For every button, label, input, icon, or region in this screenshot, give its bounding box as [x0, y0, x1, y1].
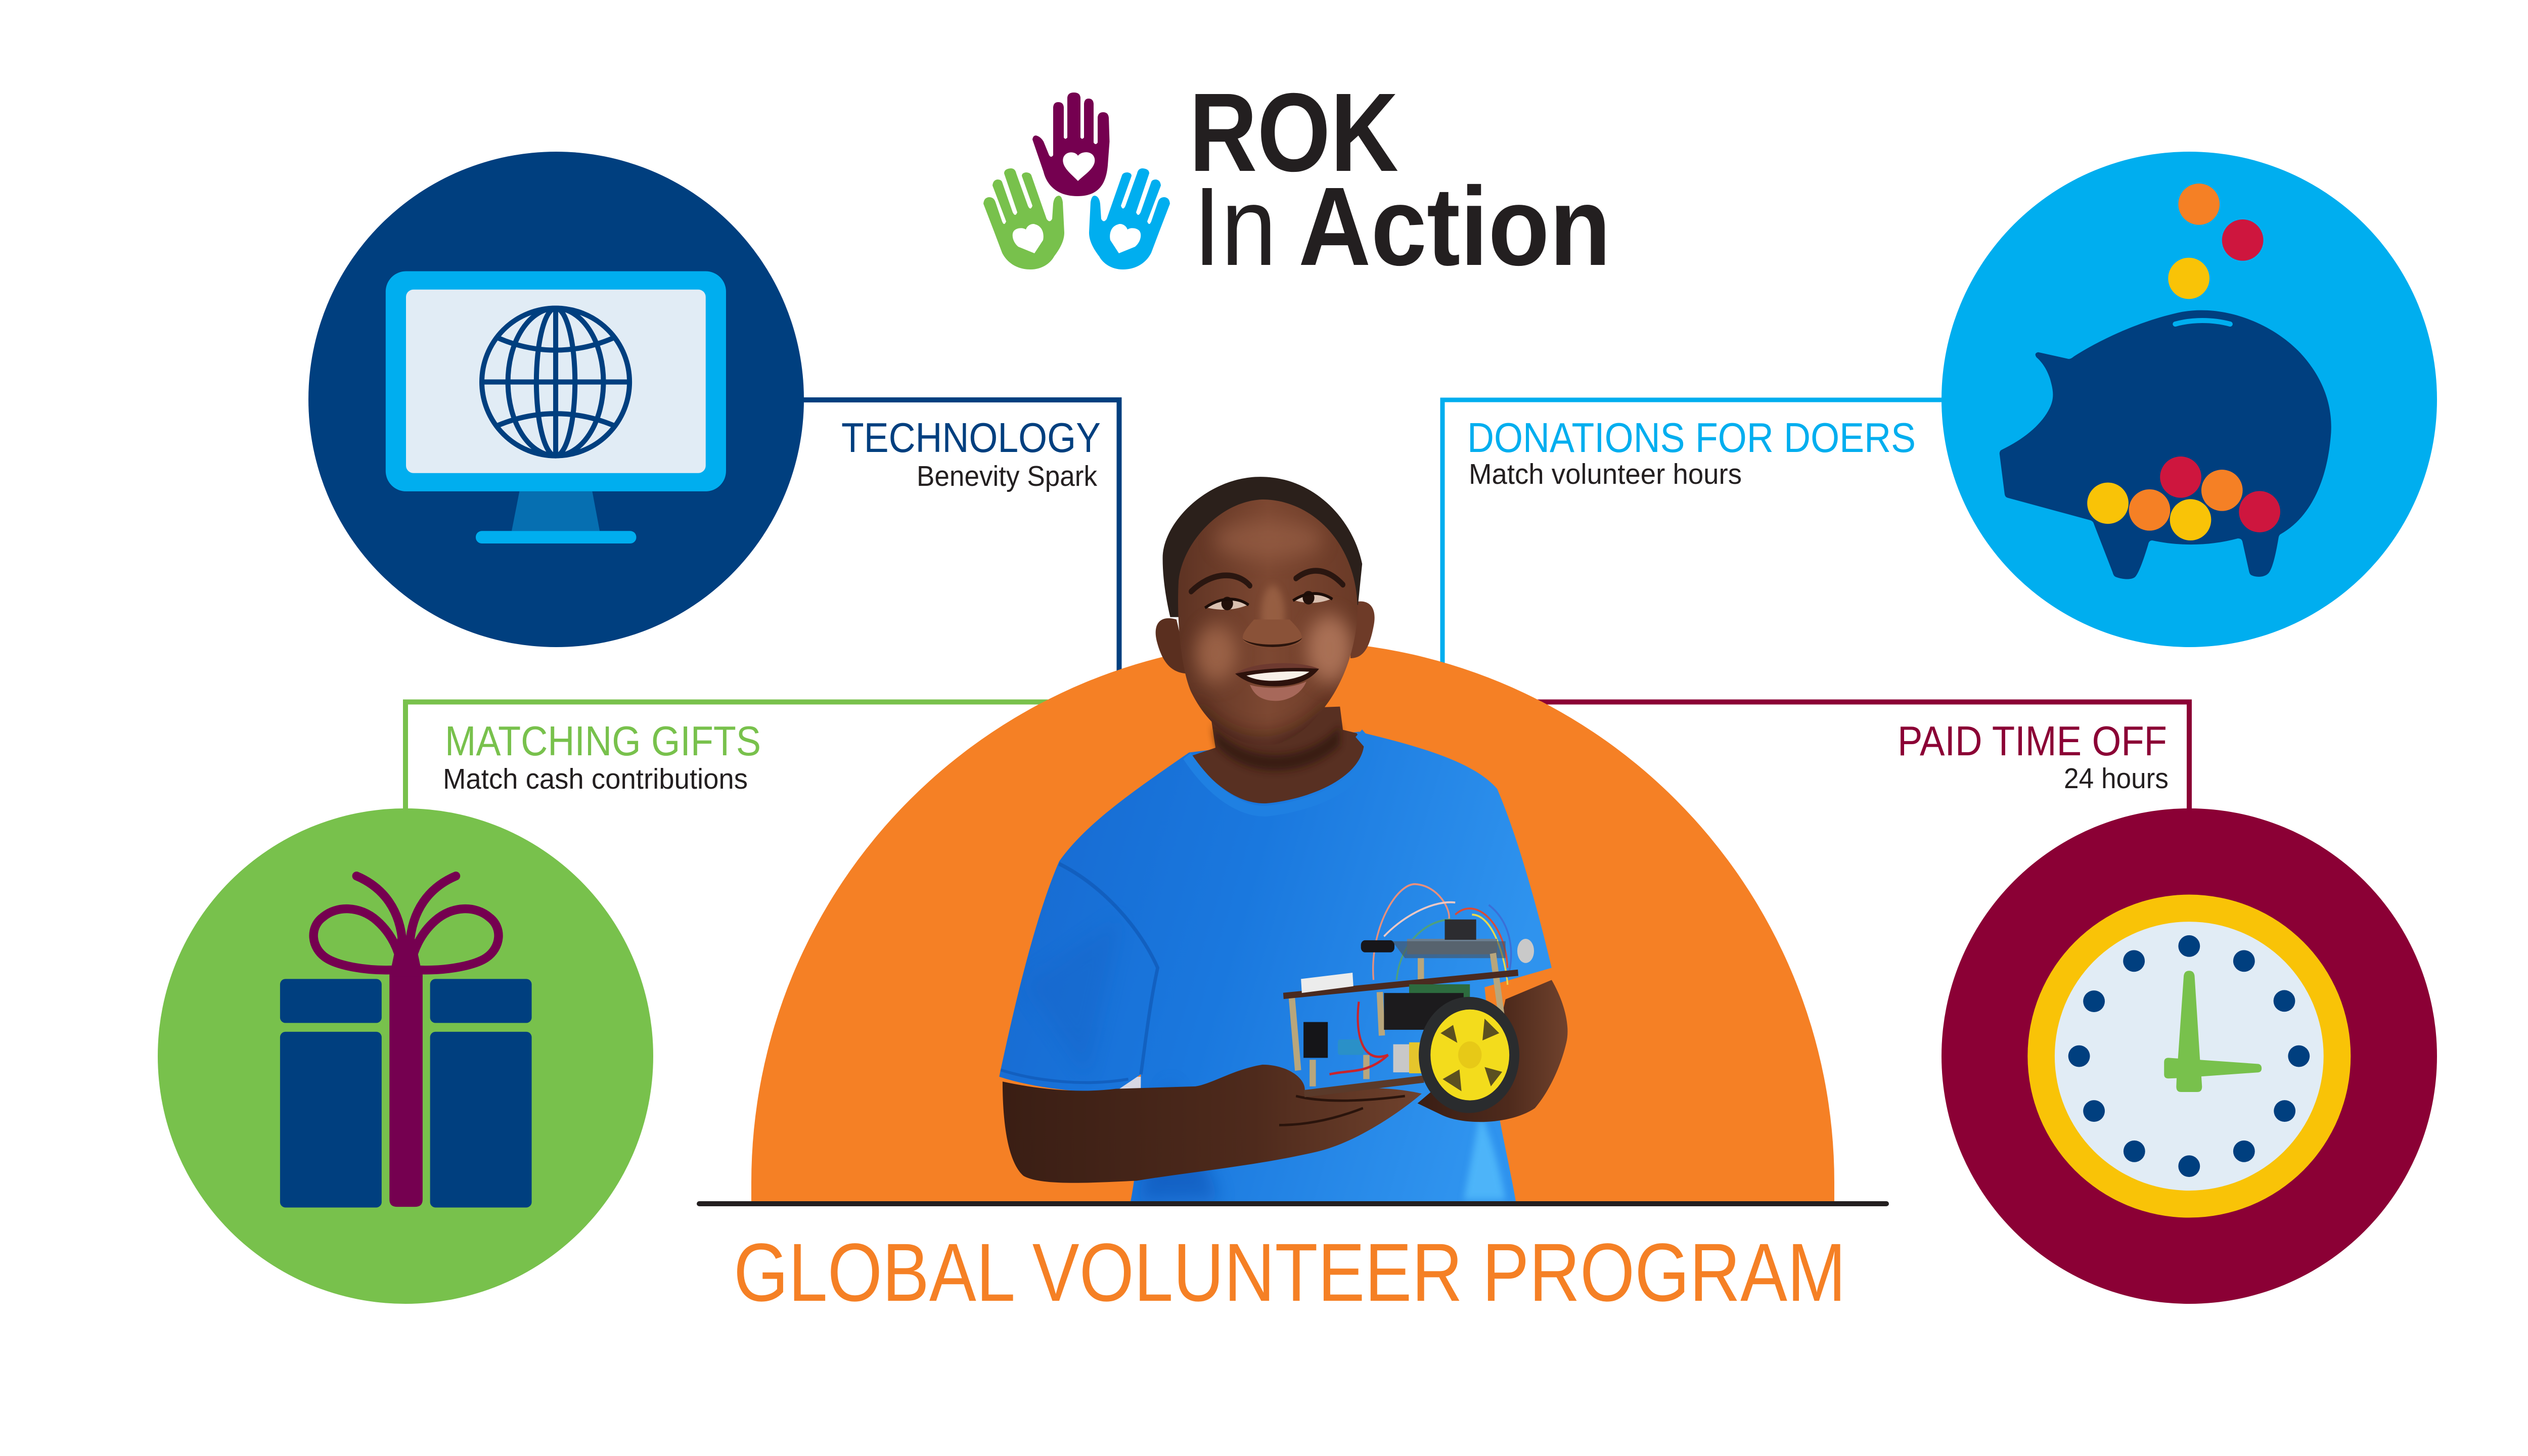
robot posts: [1292, 953, 1502, 1086]
logo wordmark: Action: Action: [1298, 164, 1611, 289]
subtext: match volunteer hours: Match volunteer hours: [1469, 458, 1742, 490]
connector: technology: [803, 400, 1119, 677]
connector: matching gifts: [405, 702, 1067, 811]
photo: smiling boy holding a robot: [999, 477, 1567, 1203]
label: matching gifts: [443, 717, 761, 795]
t-shirt: [999, 732, 1552, 1203]
icon: matching gifts circle with gift box: [158, 808, 653, 1304]
subtext: benevity spark: Benevity Spark: [917, 460, 1097, 492]
right arm and hand: [1418, 980, 1567, 1122]
coin slot: [2175, 321, 2230, 324]
heading: matching gifts: MATCHING GIFTS: [445, 717, 761, 764]
left ear: [1156, 618, 1189, 674]
left arm and hand: [1003, 1065, 1422, 1183]
label: technology: [841, 414, 1101, 492]
heading: paid time off: PAID TIME OFF: [1898, 717, 2167, 764]
coins: [2087, 184, 2280, 540]
label: donations for doers: [1467, 414, 1916, 490]
connector: paid time off: [1532, 702, 2189, 811]
eyes: [1206, 595, 1332, 610]
robot white block: [1301, 973, 1353, 993]
nose: [1242, 619, 1302, 648]
connector: donations for doers: [1442, 400, 1942, 672]
subtext: 24 hours: 24 hours: [2064, 762, 2169, 795]
title: global volunteer program: GLOBAL VOLUNTEER PROGRAM: [734, 1226, 1846, 1318]
robot lower plate: [1304, 1079, 1424, 1094]
robot components: [1303, 1022, 1328, 1058]
logo wordmark: ROK: ROK: [1189, 70, 1398, 195]
baseline bar: [697, 1201, 1889, 1206]
orange semicircle: [751, 641, 1834, 1203]
robot: [1283, 884, 1534, 1113]
logo icon: purple hand: [1032, 93, 1109, 196]
infographic canvas: [158, 93, 2437, 1304]
eyebrows: [1191, 571, 1343, 592]
chin shadow on neck: [1212, 726, 1340, 770]
face: [1178, 499, 1358, 755]
logo: ROK In Action: [983, 70, 1611, 289]
robot motor: [1393, 1044, 1410, 1072]
right ear: [1350, 601, 1375, 658]
icon: technology circle with monitor and globe: [308, 152, 804, 647]
robot wires: [1373, 884, 1511, 985]
monitor stand: [512, 491, 600, 531]
monitor base: [476, 531, 636, 543]
heading: donations for doers: DONATIONS FOR DOERS: [1467, 414, 1916, 461]
icon: donations circle with piggy bank and coins: [1942, 152, 2437, 647]
label: paid time off: [1898, 717, 2169, 795]
subtext: match cash contributions: Match cash contributions: [443, 763, 748, 795]
ribbon and bow: [313, 876, 499, 1207]
robot wheel: [1419, 997, 1519, 1113]
monitor frame: [386, 271, 726, 491]
globe: [482, 308, 629, 456]
piggy bank: [2000, 310, 2331, 579]
clock face: [2055, 922, 2324, 1191]
monitor screen: [406, 290, 706, 473]
hair: [1163, 477, 1362, 617]
gift box panels: [280, 979, 532, 1207]
heading: technology: TECHNOLOGY: [841, 414, 1101, 461]
mouth: [1235, 663, 1319, 701]
robot battery holder: [1409, 984, 1470, 1002]
robot top board: [1407, 939, 1497, 954]
clock rim: [2027, 895, 2351, 1218]
hour markers: [2068, 935, 2310, 1177]
logo icon: green hand: [983, 168, 1064, 269]
logo wordmark: In: In: [1193, 164, 1277, 289]
shirt collar: [1187, 733, 1369, 811]
background gap under sleeve: [1116, 1077, 1141, 1093]
logo icon: blue hand: [1089, 168, 1170, 269]
clock hands: [2164, 971, 2262, 1092]
icon: paid time off circle with clock: [1942, 808, 2437, 1304]
robot mid plate: [1283, 973, 1518, 996]
neck: [1191, 707, 1364, 803]
